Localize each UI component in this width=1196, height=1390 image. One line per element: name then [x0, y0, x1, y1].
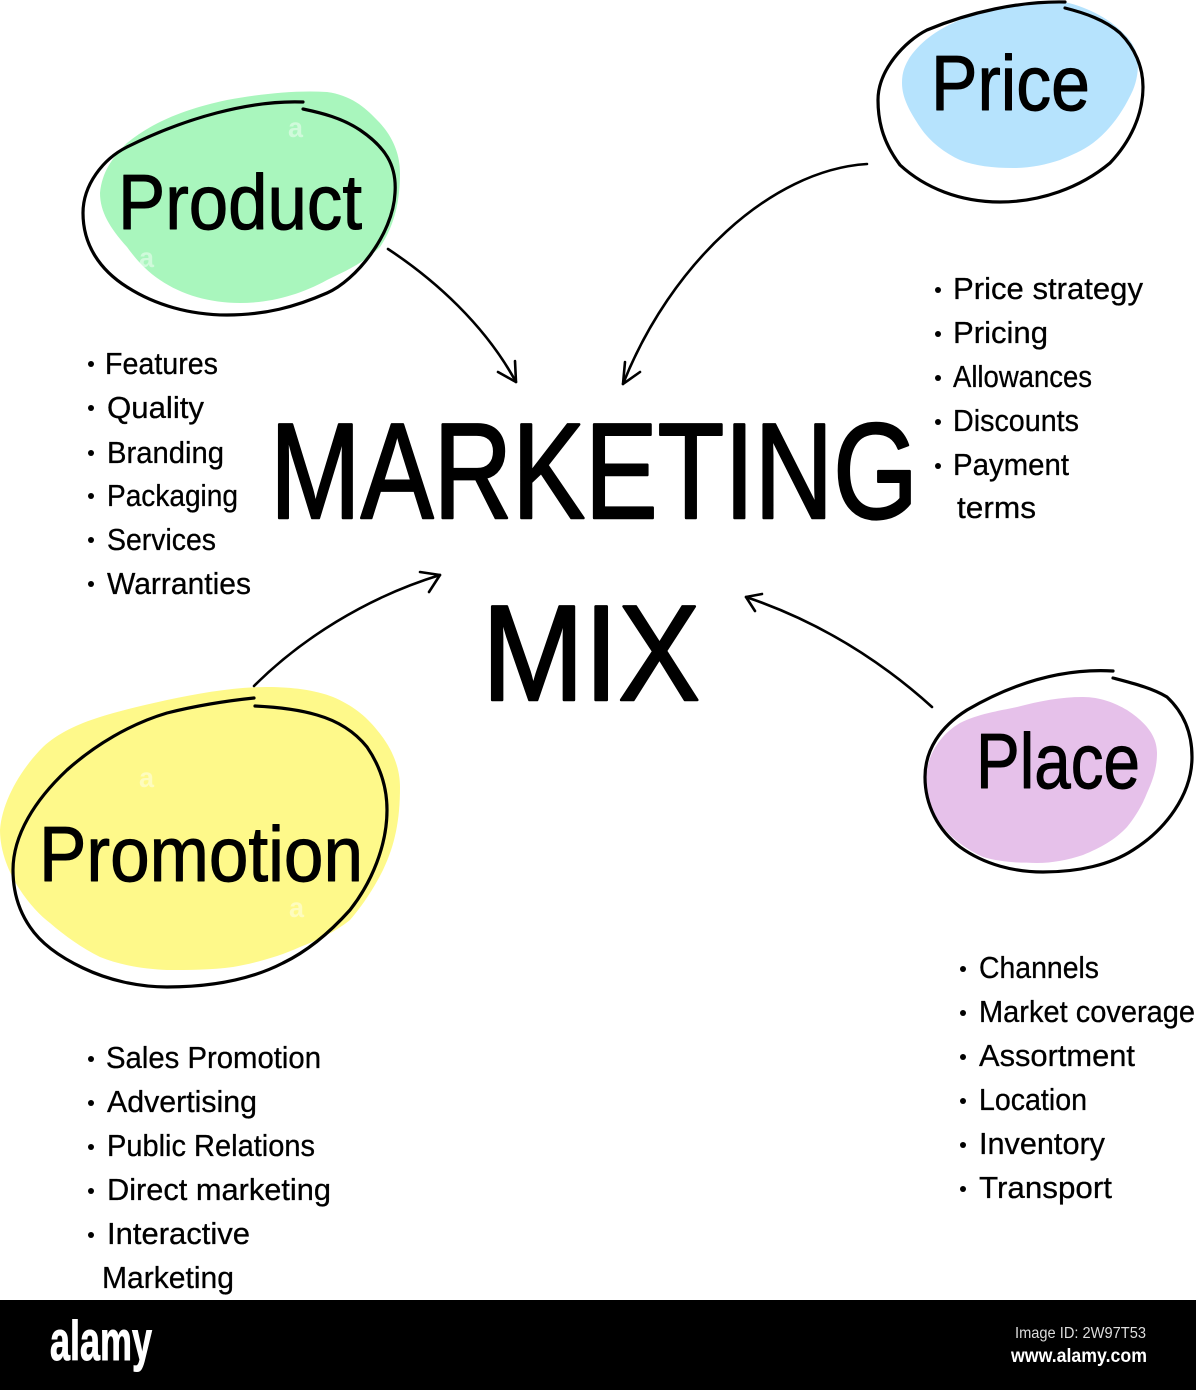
- list: price: Payment: [953, 447, 1069, 482]
- footer logo: alamy: [50, 1309, 152, 1372]
- price colour blob: [902, 2, 1138, 168]
- product outline: [83, 102, 395, 315]
- arrow: price to centre: [623, 164, 867, 384]
- list: promotion: Marketing: [102, 1260, 234, 1295]
- list: promotion: Sales Promotion: [106, 1040, 321, 1075]
- list: price: Allowances: [953, 359, 1092, 394]
- title: MIX: [482, 577, 700, 729]
- arrow: product to centre: [388, 249, 516, 382]
- promotion watermark marks: [139, 762, 304, 923]
- list: promotion: Advertising: [107, 1084, 257, 1119]
- promotion watermark marks: a: [139, 762, 154, 793]
- product bubble: [83, 91, 400, 315]
- list: product: Services: [107, 522, 216, 557]
- list: price: Pricing: [953, 315, 1048, 350]
- promotion colour blob: [0, 687, 400, 970]
- list: place: Channels: [979, 950, 1099, 985]
- list: promotion: Public Relations: [107, 1128, 315, 1163]
- footer bar: [0, 1300, 1196, 1390]
- place bubble: [925, 671, 1192, 872]
- list: place: Location: [979, 1082, 1087, 1117]
- footer website: www.alamy.com: [1010, 1346, 1147, 1367]
- list: promotion: Interactive: [107, 1216, 250, 1251]
- place colour blob: [925, 697, 1157, 863]
- list: product: Packaging: [107, 478, 238, 513]
- price label: Price: [931, 39, 1090, 127]
- title: MARKETING: [270, 395, 918, 547]
- price bubble: [878, 2, 1143, 202]
- list: product: Features: [105, 346, 218, 381]
- product colour blob: [100, 91, 400, 303]
- list: price: [935, 271, 1143, 525]
- promotion watermark marks: a: [289, 892, 304, 923]
- product watermark marks: a: [288, 112, 303, 143]
- title: [270, 395, 918, 729]
- footer image id: Image ID: 2W97T53: [1015, 1325, 1146, 1342]
- price outline: [878, 2, 1143, 202]
- list: promotion: [88, 1040, 331, 1295]
- list: price: Price strategy: [953, 271, 1143, 306]
- product label: Product: [118, 158, 362, 246]
- list: price: terms: [957, 490, 1036, 525]
- promotion outline: [13, 698, 387, 987]
- list: product: [88, 346, 251, 601]
- list: place: Assortment: [979, 1038, 1135, 1073]
- product watermark marks: [139, 112, 303, 273]
- list: place: Transport: [979, 1170, 1112, 1205]
- product watermark marks: a: [139, 242, 154, 273]
- arrow: place to centre: [746, 594, 932, 707]
- promotion label: Promotion: [39, 810, 363, 898]
- promotion bubble: [0, 687, 400, 987]
- arrow: promotion to centre: [254, 572, 440, 686]
- list: product: Quality: [107, 390, 204, 425]
- list: promotion: Direct marketing: [107, 1172, 331, 1207]
- place label: Place: [976, 717, 1140, 805]
- list: place: [960, 950, 1195, 1205]
- list: price: Discounts: [953, 403, 1079, 438]
- list: place: Inventory: [979, 1126, 1105, 1161]
- list: product: Warranties: [107, 566, 251, 601]
- list: product: Branding: [107, 435, 224, 470]
- place outline: [925, 671, 1192, 872]
